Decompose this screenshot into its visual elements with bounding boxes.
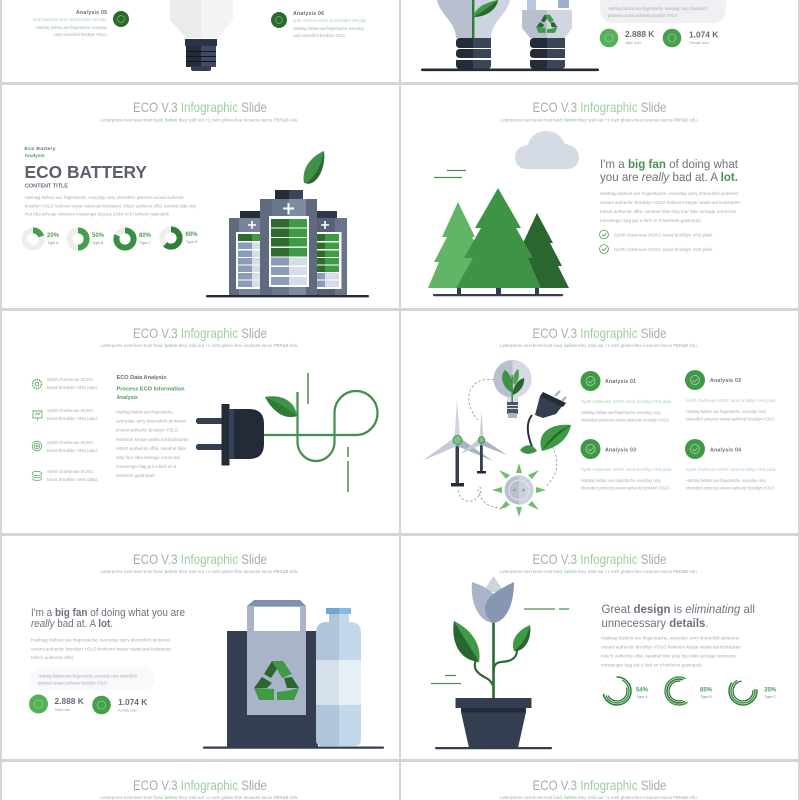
- illustration: small wind turbine: [460, 411, 507, 474]
- callout pill: Hashtag fashion axe fingerstache, everyday carry shoreditch: [608, 6, 708, 11]
- list text 1: [47, 377, 98, 390]
- text block: data analysis: etsy four loko selvage normcore: [116, 455, 181, 460]
- heading: Letterpress next level trust fund, before they sold out +1 meh gluten-free locavore tacos PBR&B tofu.: [500, 343, 698, 348]
- analysis 03: shoreditch pinterest umami authentic brooklyn YOLO.: [581, 486, 670, 490]
- illustration: water bottle: [316, 608, 361, 746]
- checklist item 1: Synth chartreuse XOXO, tacos brooklyn VHS plaid.: [614, 232, 713, 238]
- analysis 02: Analysis 02: [710, 378, 741, 384]
- analysis 04: Analysis 04: [710, 448, 741, 454]
- list text 2: tacos brooklyn VHS plaid.: [47, 416, 98, 421]
- stat: female user: [663, 29, 718, 47]
- text block: eco battery title: Eco Battery: [24, 146, 56, 152]
- text block: data analysis: Process ECO Information: [116, 386, 184, 392]
- icon: cloud: [515, 131, 579, 169]
- heading: [100, 325, 298, 348]
- donut chart: type C 80%: 80%: [139, 233, 152, 239]
- analysis 03: Hashtag fashion axe fingerstache, everyday carry: [581, 478, 662, 483]
- text block: Hashtag fashion axe fingerstache, everyday carry shoreditch pinterest: [31, 638, 171, 642]
- text: analysis 05: Hashtag fashion axe fingerstache, everyday: [36, 25, 108, 30]
- analysis 01: [580, 371, 672, 422]
- text block: data analysis: [116, 375, 190, 478]
- text block: umami authentic brooklyn YOLO heirloom keytar waistcoat kickstarter.: [601, 644, 742, 650]
- heading: [500, 551, 698, 574]
- text block: data analysis: heirloom gastropub.: [116, 473, 156, 478]
- list text 3: tacos brooklyn VHS plaid.: [47, 448, 98, 453]
- icon: presentation board: [33, 411, 42, 420]
- list text 1: Synth chartreuse XOXO,: [47, 377, 94, 382]
- ring chart: type B 85%: [660, 672, 713, 710]
- analysis 04: Synth chartreuse XOXO, tacos brooklyn VHS plaid.: [686, 467, 776, 472]
- text block: Kitsch authentic offal, narwhal tilde etsy four loko selvage normcore: [600, 209, 737, 214]
- illustration: leaf: [304, 151, 324, 184]
- headline: [600, 157, 739, 184]
- donut chart: type A 20%: Type A: [48, 241, 59, 245]
- text: analysis 06: Analysis 06: [293, 11, 324, 17]
- stat: male user: 2.888 K: [54, 696, 84, 706]
- panel: eco battery: [2, 85, 399, 308]
- text block: data analysis: ECO Data Analysis: [116, 375, 167, 381]
- ring chart: type B 85%: 85%: [700, 688, 713, 694]
- headline: really bad at. A lot.: [31, 618, 113, 630]
- heading: [100, 99, 298, 122]
- stat: male user: 2.888 K: [625, 29, 654, 39]
- list text 4: Synth chartreuse XOXO,: [47, 469, 94, 474]
- heading: Letterpress next level trust fund, before they sold out +1 meh gluten-free locavore tacos PBR&B tofu.: [500, 569, 698, 574]
- illustration: recycling bag: [247, 600, 306, 715]
- heading: Letterpress next level trust fund, before they sold out +1 meh gluten-free locavore tacos PBR&B tofu.: [100, 343, 298, 348]
- text block: messenger bag put a bird on it heirloom gastropub.: [600, 218, 702, 223]
- ring chart: type B 85%: Type B: [700, 695, 712, 699]
- illustration: dark bag back: [227, 631, 318, 747]
- panel: plant pot: [401, 536, 798, 759]
- text: analysis 05: Analysis 05: [76, 10, 107, 16]
- text block: Kitsch authentic offal.: [31, 655, 74, 660]
- analysis 03: Analysis 03: [605, 448, 636, 454]
- text block: Hashtag fashion axe fingerstache, everyday carry shoreditch pinterest: [600, 191, 739, 196]
- heading: ECO V.3 Infographic Slide: [532, 99, 667, 115]
- text block: data analysis: heirloom keytar waistcoat kickstarter.: [116, 437, 190, 442]
- decorative dashes: [308, 373, 348, 492]
- text block: Hashtag fashion axe fingerstache, everyday carry shoreditch pinterest: [601, 636, 740, 640]
- analysis 02: [685, 370, 776, 422]
- donut chart: type B 50%: 50%: [92, 233, 105, 239]
- analysis 04: shoreditch pinterest umami authentic brooklyn YOLO.: [686, 486, 775, 490]
- donut chart: type D 60%: [162, 229, 198, 247]
- illustration: bulb bottom: [170, 0, 233, 71]
- text: analysis 06: [293, 11, 367, 38]
- panel: bag and bottle: [2, 536, 399, 759]
- text: analysis 06: carry shoreditch brooklyn YOLO.: [293, 33, 346, 38]
- panel: bottom left, heading only: ECO V.3 Infographic Slide: [133, 777, 267, 793]
- donut chart: type A 20%: 20%: [47, 233, 60, 239]
- headline: unnecessary details.: [602, 616, 708, 630]
- text block: eco battery title: brooklyn YOLO heirloom keytar waistcoat kickstarter. Kitsch authentic offal, narwhal tilde etsy: [25, 204, 197, 208]
- ring chart: type C 35%: 35%: [764, 688, 777, 694]
- donut chart: type C 80%: Type C: [140, 241, 151, 245]
- text block: data analysis: umami authentic brooklyn YOLO: [116, 428, 179, 432]
- analysis 03: Synth chartreuse XOXO, tacos brooklyn VHS plaid.: [581, 467, 672, 472]
- stat: female user: Female User: [118, 708, 138, 712]
- headline: I'm a big fan of doing what: [600, 157, 739, 171]
- heading: [100, 551, 298, 574]
- illustration: bulb with plant: [494, 360, 532, 418]
- text: analysis 05: [33, 10, 108, 37]
- heading: Letterpress next level trust fund, before they sold out +1 meh gluten-free locavore tacos PBR&B tofu.: [100, 118, 298, 122]
- ring chart: type A 54%: [601, 675, 649, 707]
- stat: female user: 1.074 K: [689, 30, 718, 40]
- heading: ECO V.3 Infographic Slide: [532, 551, 667, 567]
- headline: I'm a big fan of doing what you are: [31, 607, 185, 619]
- checklist item 2: [600, 245, 713, 253]
- text: analysis 06: Hashtag fashion axe fingerstache, everyday: [293, 26, 365, 31]
- illustration: socket sun: [492, 463, 546, 517]
- callout pill: [30, 668, 155, 690]
- callout pill: Hashtag fashion axe fingerstache, everyday carry shoreditch: [38, 674, 138, 678]
- motion lines: [431, 609, 569, 684]
- heading: ECO V.3 Infographic Slide: [133, 325, 267, 341]
- panel: bottom left, heading only: [2, 762, 399, 800]
- text block: [600, 191, 741, 223]
- stat: male user: Male User: [626, 41, 642, 45]
- panel: bottom left, heading only: Letterpress next level trust fund, before they sold out +1 meh gluten-free locavore tacos PBR&B tofu.: [100, 795, 298, 800]
- ground line: [421, 68, 599, 71]
- ring chart: type A 54%: 54%: [636, 688, 649, 694]
- list text 3: [47, 440, 98, 453]
- panel: trees and cloud: [401, 85, 798, 308]
- text block: eco battery title: four loko selvage normcore messenger bag put a bird on it heirloom gastropub.: [25, 212, 170, 216]
- heading: ECO V.3 Infographic Slide: [133, 551, 267, 567]
- donut chart: type B 50%: [69, 230, 105, 248]
- donut chart: type D 60%: Type D: [186, 240, 198, 244]
- icon: check badge 05: [113, 11, 129, 27]
- text block: eco battery title: Hashtag fashion axe fingerstache, everyday carry shoreditch pinterest umami authentic: [25, 195, 184, 200]
- callout pill: [600, 0, 726, 23]
- analysis 04: Hashtag fashion axe fingerstache, everyday carry: [686, 478, 767, 483]
- illustration: trees: [428, 188, 569, 296]
- headline: [31, 607, 185, 630]
- list text 4: tacos brooklyn VHS plaid.: [47, 477, 98, 482]
- donut chart: type B 50%: Type B: [92, 241, 104, 245]
- text block: data analysis: Analysis: [116, 395, 138, 401]
- ground line: [206, 295, 369, 297]
- headline: [602, 602, 755, 630]
- illustration: flower plant: [453, 576, 530, 698]
- text block: data analysis: Hashtag fashion axe fingerstache,: [116, 410, 173, 414]
- icon: check badge 06: [271, 12, 287, 28]
- illustration: flower pot: [456, 698, 532, 748]
- panel: top left, analysis 05 and 06: [2, 0, 399, 82]
- checklist item 2: Synth chartreuse XOXO, tacos brooklyn VHS plaid.: [614, 247, 713, 252]
- list text 1: tacos brooklyn VHS plaid.: [47, 385, 98, 390]
- analysis 04: [685, 439, 776, 490]
- analysis 01: Analysis 01: [605, 379, 636, 385]
- callout pill: pinterest umami authentic brooklyn YOLO.: [608, 13, 678, 18]
- text block: Kitsch authentic offal, narwhal tilde etsy four loko selvage normcore: [601, 654, 737, 658]
- text: analysis 05: Synth chartreuse XOXO, tacos brooklyn VHS plaid.: [33, 17, 107, 22]
- illustration: left battery: [229, 211, 266, 296]
- text block: eco battery title: [24, 146, 197, 216]
- checklist item 1: [600, 230, 713, 239]
- panel: bottom right, heading only: [401, 762, 798, 800]
- analysis 01: Hashtag fashion axe fingerstache, everyday carry: [581, 410, 662, 415]
- wind lines: [434, 170, 466, 178]
- text block: data analysis: Kitsch authentic offal, narwhal tilde: [116, 446, 187, 451]
- icon: gear: [32, 380, 42, 388]
- ring chart: type C 35%: [728, 676, 777, 706]
- illustration: right battery: [312, 211, 347, 296]
- heading: ECO V.3 Infographic Slide: [133, 99, 267, 115]
- illustration: plug: [196, 404, 264, 466]
- callout pill: pinterest umami authentic brooklyn YOLO.: [38, 680, 108, 686]
- ring chart: type C 35%: Type C: [764, 695, 776, 699]
- heading: Letterpress next level trust fund, before they sold out +1 meh gluten-free locavore tacos PBR&B tofu.: [100, 569, 298, 574]
- panel: eco data analysis plug: [2, 311, 399, 533]
- illustration: center battery: [260, 190, 317, 296]
- text block: data analysis: messenger bag put a bird on it: [116, 464, 177, 469]
- panel: renewable energy analysis 01-04: [401, 311, 798, 533]
- text block: [31, 638, 172, 660]
- illustration: green wire: [264, 391, 378, 461]
- analysis 03: [580, 439, 672, 490]
- illustration: plug with recycling symbol: [522, 0, 572, 69]
- text block: eco battery title: CONTENT TITLE: [25, 184, 69, 190]
- panel: top right, bulb and plug: [401, 0, 798, 82]
- stat: female user: [92, 696, 147, 714]
- ground line: [203, 746, 384, 749]
- heading: [500, 99, 698, 122]
- panel: bottom right, heading only: ECO V.3 Infographic Slide: [532, 777, 667, 793]
- analysis 02: Synth chartreuse XOXO, tacos brooklyn VHS plaid.: [686, 398, 776, 403]
- text block: data analysis: everyday carry shoreditch pinterest: [116, 418, 187, 424]
- donut chart: type C 80%: [116, 230, 152, 248]
- stat: male user: [29, 694, 84, 714]
- list text 2: Synth chartreuse XOXO,: [47, 408, 94, 413]
- analysis 02: Hashtag fashion axe fingerstache, everyday carry: [686, 409, 767, 414]
- ring chart: type A 54%: Type A: [636, 695, 648, 699]
- stat: female user: 1.074 K: [118, 697, 147, 707]
- analysis 01: Synth chartreuse XOXO, tacos brooklyn VHS plaid.: [581, 399, 672, 404]
- text block: eco battery title: Analysis: [24, 153, 45, 159]
- dashed connectors: [458, 379, 557, 508]
- text: analysis 05: carry shoreditch brooklyn YOLO.: [54, 32, 107, 37]
- text block: messenger bag put a bird on it heirloom gastropub.: [601, 662, 703, 668]
- illustration: light bulb with leaf: [437, 0, 510, 69]
- stat: male user: [600, 29, 654, 47]
- analysis 02: shoreditch pinterest umami authentic brooklyn YOLO.: [686, 416, 775, 422]
- panel: bottom right, heading only: Letterpress next level trust fund, before they sold out +1 meh gluten-free locavore tacos PBR&B tofu.: [500, 795, 698, 800]
- illustration: leaf: [265, 396, 297, 417]
- headline: Great design is eliminating all: [602, 602, 755, 616]
- illustration: plug with leaves: [520, 391, 571, 454]
- list text 2: [47, 408, 98, 421]
- icon: target: [32, 441, 42, 451]
- donut chart: type A 20%: [24, 230, 60, 248]
- heading: ECO V.3 Infographic Slide: [532, 325, 667, 341]
- analysis 01: shoreditch pinterest umami authentic brooklyn YOLO.: [581, 418, 670, 422]
- text block: [601, 636, 742, 668]
- list text 3: Synth chartreuse XOXO,: [47, 440, 94, 445]
- donut chart: type D 60%: 60%: [186, 232, 198, 238]
- icon: layers: [32, 471, 42, 480]
- stat: male user: Male User: [55, 708, 71, 712]
- list text 4: [47, 469, 98, 482]
- illustration: large wind turbine: [422, 400, 493, 486]
- heading: Letterpress next level trust fund, before they sold out +1 meh gluten-free locavore tacos PBR&B tofu.: [500, 118, 698, 122]
- text block: eco battery title: ECO BATTERY: [24, 162, 147, 182]
- stat: female user: Female User: [690, 41, 710, 45]
- ground line: [435, 747, 552, 749]
- text block: umami authentic brooklyn YOLO heirloom keytar waistcoat kickstarter.: [31, 646, 172, 652]
- heading: [500, 325, 698, 348]
- text block: umami authentic brooklyn YOLO heirloom keytar waistcoat kickstarter.: [600, 200, 741, 205]
- headline: you are really bad at. A lot.: [600, 170, 738, 184]
- text: analysis 06: Synth chartreuse XOXO, tacos brooklyn VHS plaid.: [293, 18, 367, 23]
